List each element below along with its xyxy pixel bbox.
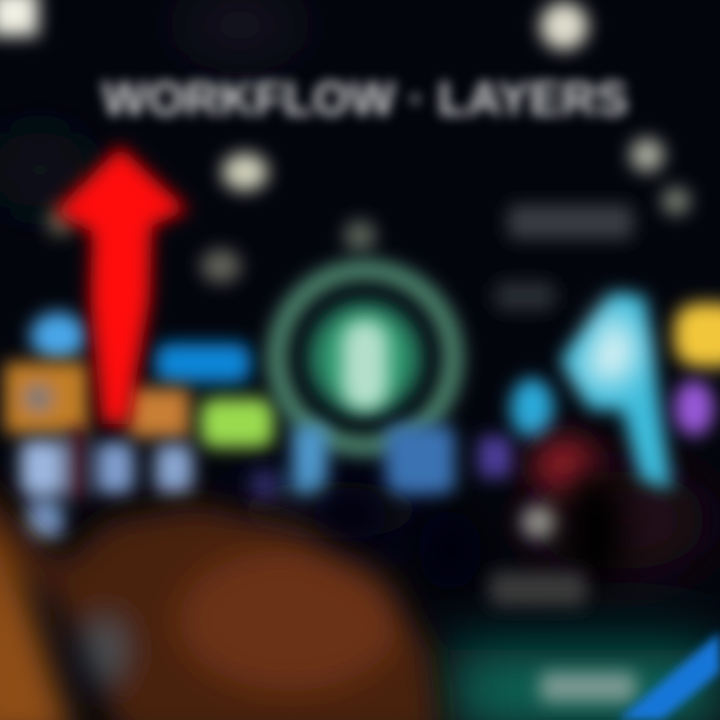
green badge — [200, 398, 274, 448]
corner marker top left — [0, 0, 38, 36]
side text block right — [495, 205, 633, 310]
purple badge right — [674, 380, 714, 436]
blue diagonal stroke — [618, 632, 720, 720]
red lower shape — [533, 437, 597, 493]
small dots centre-left — [46, 153, 376, 283]
cyan small pill — [510, 378, 554, 438]
small dots right — [630, 138, 690, 215]
lower caption block — [490, 505, 586, 606]
blue bars under badge — [250, 425, 512, 500]
orange tiles — [4, 362, 190, 438]
blue pill left — [30, 312, 86, 360]
green circular badge — [277, 270, 453, 446]
top right dot — [540, 2, 588, 50]
lower icon tiles — [20, 430, 193, 540]
dark silhouettes — [312, 470, 625, 590]
foreground hand — [0, 470, 440, 720]
title: WORKFLOW · LAYERS — [102, 73, 628, 126]
yellow pill right — [674, 303, 720, 367]
red arrow — [54, 146, 188, 424]
cyan mountain shape — [560, 292, 672, 490]
bottom label — [540, 672, 636, 702]
blue bar — [155, 343, 251, 383]
